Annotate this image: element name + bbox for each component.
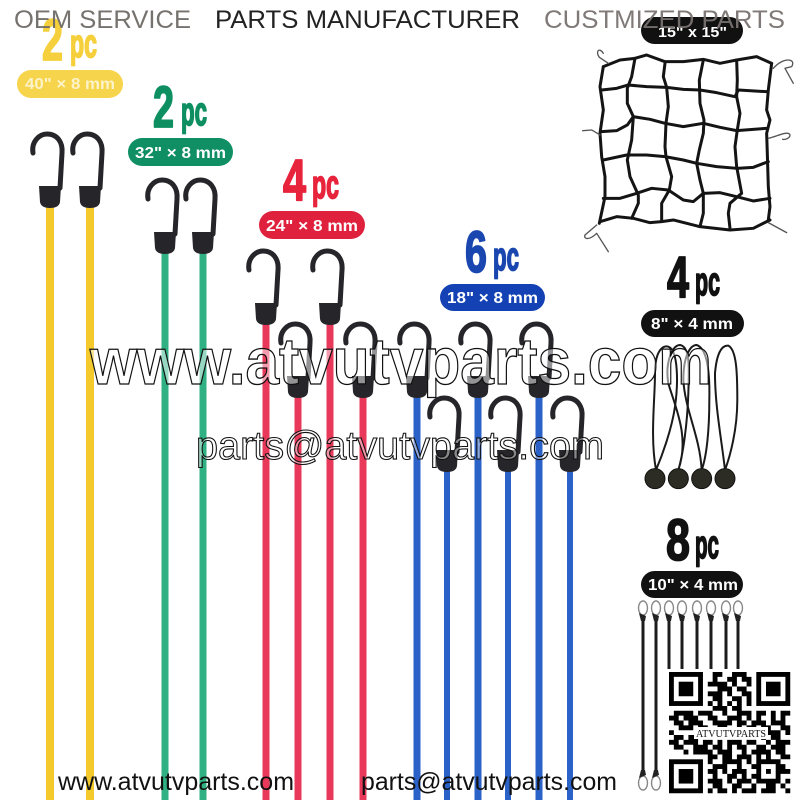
heading: 2 pc green [153,75,207,140]
cargo net [583,50,793,252]
size pill: 15 x 15 in: 15" x 15" [658,24,727,41]
watermark: email: parts@atvutvparts.com [196,424,604,468]
size pill: 18 in x 8 mm [440,284,545,311]
heading: 2 pc yellow: pc [70,22,97,66]
size pill: 32 in x 8 mm [128,138,233,166]
heading: 4 pc red [283,148,339,213]
heading: 4 pc black [667,245,720,310]
size pill: 10 in x 4 mm [641,571,743,598]
heading: 6 pc blue [465,220,519,285]
size pill: 15 x 15 in [641,17,743,44]
cords and hooks: red [249,251,375,800]
size pill: 8 in x 4 mm: 8" × 4 mm [651,316,733,333]
panel: yellow cords 40 in [17,8,123,800]
cords and hooks: yellow [33,134,102,800]
size pill: 24 in x 8 mm [259,211,365,239]
panel: blue cords 18 in [400,220,582,800]
heading: 4 pc red: pc [312,163,339,207]
footer: website: www.atvutvparts.com [57,769,294,796]
QR centre label: ATVUTVPARTS [696,729,766,740]
heading: 6 pc blue: 6 [465,220,487,285]
size pill: 32 in x 8 mm: 32" × 8 mm [135,145,226,162]
panel: green cords 32 in [128,75,233,800]
size pill: 40 in x 8 mm [17,70,123,98]
panel: cargo net 15 x 15 in [583,17,793,252]
panel: mini bungees 10 in [638,508,743,790]
header: service labels: CUSTMIZED PARTS [544,6,785,34]
mini bungee cords [638,601,742,790]
QR code [666,669,793,796]
footer: email: parts@atvutvparts.com [361,769,617,796]
heading: 8 pc black: pc [695,523,719,567]
watermark: website: www.atvutvparts.com [89,324,712,398]
heading: 8 pc black: 8 [666,508,690,573]
ball bungee loops [645,345,737,489]
heading: 2 pc green: pc [181,90,207,134]
panel: ball bungees 8 in [641,245,744,489]
heading: 2 pc green: 2 [153,75,174,140]
heading: 2 pc yellow: 2 [42,8,63,73]
size pill: 10 in x 4 mm: 10" × 4 mm [648,577,738,594]
heading: 8 pc black [666,508,719,573]
heading: 4 pc black: 4 [667,245,689,310]
heading: 4 pc black: pc [695,260,720,304]
size pill: 8 in x 4 mm [641,310,744,337]
cords and hooks: blue [400,324,582,800]
panel: red cords 24 in [249,148,375,800]
header: service labels [14,6,785,34]
heading: 4 pc red: 4 [283,148,306,213]
size pill: 24 in x 8 mm: 24" × 8 mm [266,218,358,235]
header: service labels: PARTS MANUFACTURER [215,6,520,34]
heading: 6 pc blue: pc [493,235,519,279]
cords and hooks: green [148,180,215,800]
header: service labels: OEM SERVICE [14,6,191,34]
size pill: 18 in x 8 mm: 18" × 8 mm [447,290,538,307]
heading: 2 pc yellow [42,8,97,73]
size pill: 40 in x 8 mm: 40" × 8 mm [25,76,115,93]
